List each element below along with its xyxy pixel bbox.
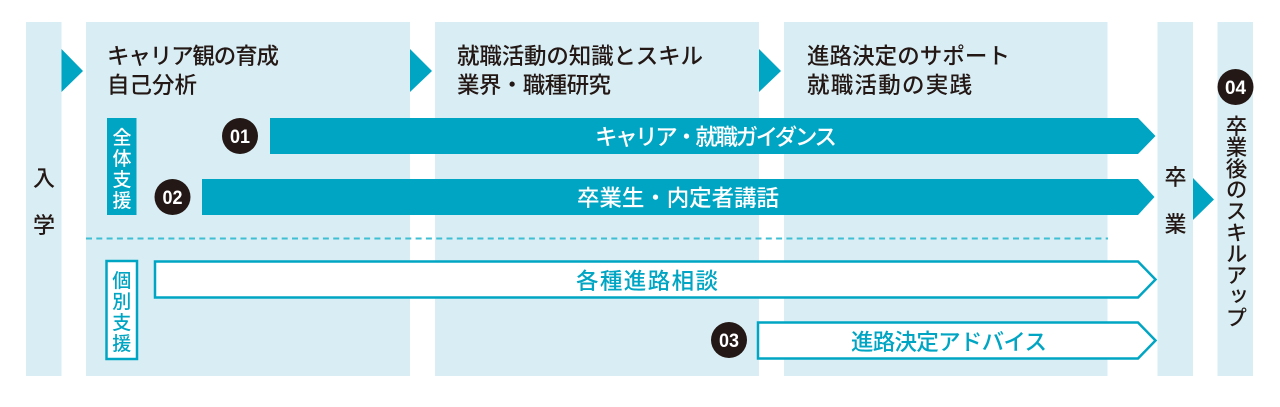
number badge 02: 02 — [162, 188, 182, 209]
number badge 01 — [222, 118, 258, 154]
label: group support — [107, 118, 136, 215]
bar: alumni lectures: 卒業生・内定者講話 — [577, 186, 779, 211]
number badge 01: 01 — [230, 127, 250, 148]
panel: stage three: 就職活動の実践 — [807, 73, 972, 98]
panel: stage two: 業界・職種研究 — [457, 73, 611, 98]
number badge 03: 03 — [719, 331, 739, 352]
label: individual support: 支 — [112, 312, 131, 334]
column: graduation — [1158, 22, 1193, 376]
panel: stage one: 自己分析 — [107, 73, 197, 98]
column: graduation: 業 — [1164, 212, 1187, 237]
number badge 02 — [154, 179, 190, 215]
label: group support: 全 — [112, 127, 132, 149]
arrow: enrollment to stage one — [62, 49, 83, 92]
bar: career counseling: 各種進路相談 — [576, 269, 718, 294]
bar: career counseling — [155, 262, 1156, 298]
label: group support: 支 — [112, 169, 132, 191]
panel: stage two: 就職活動の知識とスキル — [457, 44, 703, 69]
bar: career decision advice — [758, 322, 1156, 358]
label: individual support: 別 — [112, 291, 131, 313]
arrow: graduation to post-graduation — [1193, 178, 1214, 220]
column: enrollment: 入 — [33, 166, 55, 191]
number badge 04: 04 — [1225, 78, 1246, 99]
bar: alumni lectures — [202, 179, 1154, 215]
bar: career decision advice: 進路決定アドバイス — [851, 330, 1047, 355]
column: enrollment: 学 — [33, 213, 55, 238]
panel: stage three: 進路決定のサポート — [807, 44, 1010, 69]
column: graduation: 卒 — [1164, 165, 1187, 190]
label: group support: 体 — [112, 148, 132, 170]
divider — [86, 238, 1108, 240]
panel: stage two — [435, 22, 759, 376]
label: individual support: 個 — [112, 270, 131, 292]
panel: stage one: キャリア観の育成 — [107, 44, 279, 69]
number badge 04 — [1218, 69, 1254, 105]
number badge 03 — [711, 322, 747, 358]
label: individual support: 援 — [112, 333, 131, 355]
bar: career guidance: キャリア・就職ガイダンス — [595, 125, 837, 150]
column: post-graduation skill-up — [1218, 22, 1253, 376]
arrow: stage one to stage two — [410, 49, 432, 92]
label: individual support — [106, 261, 137, 359]
column: enrollment — [26, 22, 62, 376]
panel: stage one — [86, 22, 410, 376]
bar: career guidance — [270, 118, 1156, 154]
arrow: stage two to stage three — [759, 49, 781, 92]
panel: stage three — [784, 22, 1108, 376]
column: post-graduation skill-up: 卒業後のスキルアップ — [1223, 115, 1247, 328]
label: group support: 援 — [112, 190, 132, 212]
